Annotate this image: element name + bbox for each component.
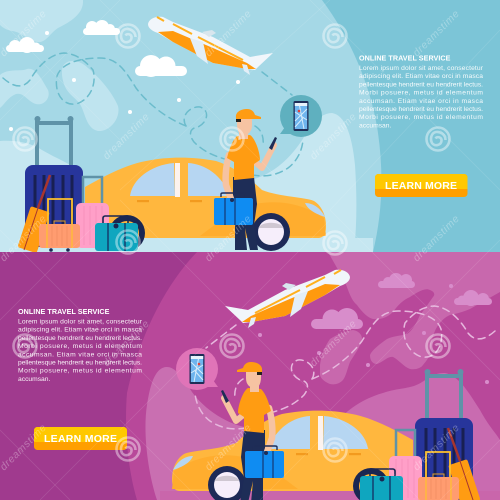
watermark overlay: dreamstime [101,111,152,162]
text block: bottom heading and body: accumsan. Etiam vitae orci in masca [18,351,142,358]
pink world map top right [328,252,500,369]
light map blobs [0,0,118,131]
map dots [9,31,240,131]
watermark overlay: dreamstime [203,422,254,473]
panel: blue top banner [0,0,500,253]
text block: bottom heading and body: ONLINE TRAVEL SERVICE [18,307,110,316]
text block: top heading and body [359,54,484,129]
dashed flight route [3,53,303,176]
airplane [225,270,350,328]
dashed flight route [195,306,495,429]
button: top learn more [375,174,468,197]
text block: top heading and body: Lorem ipsum dolor sit amet, consectetur [359,65,484,72]
ground strip [160,491,335,500]
text block: bottom heading and body [18,307,143,383]
watermark overlay: dreamstime [203,213,254,264]
text block: bottom heading and body: pellentesque hendrerit eu hendrerit lectus. [18,335,142,342]
yellow car [85,158,326,251]
traveller man with bag and phone [221,362,284,500]
button: bottom learn more [34,427,127,450]
pink hill right [346,373,500,491]
text block: top heading and body: adipiscing elit. Etiam vitae orci in masca [359,73,483,80]
pink clouds [311,273,492,330]
text block: bottom heading and body: Morbi posuere, metus id elementum [18,343,142,350]
text block: top heading and body: pellentesque hendrerit eu hendrerit lectus. [359,106,483,113]
text block: top heading and body: pellentesque hendrerit eu hendrerit lectus. [359,81,483,88]
light hill right [254,113,356,238]
watermark overlay: dreamstime [101,318,152,369]
yellow car [172,411,413,500]
text block: bottom heading and body: accumsan. [18,376,50,383]
speech bubble with phone map [176,348,218,390]
light hill left [0,140,69,238]
button: bottom learn more: LEARN MORE [44,433,117,445]
text block: bottom heading and body: adipiscing elit. Etiam vitae orci in masca [18,327,142,334]
traveller man with bag and phone [214,109,277,250]
watermark overlay: dreamstime [203,8,254,59]
watermark overlay: dreamstime [411,422,462,473]
panel: purple bottom banner [0,252,500,500]
text block: top heading and body: accumsan. Etiam vitae orci in masca [359,98,483,105]
speech bubble with phone map [280,95,322,137]
lighter right background [126,252,500,500]
ground strip [70,238,373,252]
text block: top heading and body: accumsan. [359,122,391,129]
clouds [6,20,187,77]
text block: top heading and body: Morbi posuere, metus id elementum [359,114,483,121]
text block: bottom heading and body: Lorem ipsum dolor sit amet, consectetur [18,318,143,326]
watermark overlay: dreamstime [308,318,359,369]
airplane [148,17,273,75]
button: top learn more: LEARN MORE [385,180,457,192]
darker right background [322,0,500,252]
watermark overlay: dreamstime [411,213,462,264]
text block: top heading and body: ONLINE TRAVEL SERVICE [359,54,451,62]
pink map blob left [320,330,362,384]
luggage group [17,116,145,253]
text block: bottom heading and body: Morbi posuere, metus id elementum [18,368,142,375]
text block: top heading and body: Morbi posuere, metus id elementum [359,90,483,97]
text block: bottom heading and body: pellentesque hendrerit eu hendrerit lectus. [18,360,142,366]
luggage group [353,369,481,500]
watermark overlay: dreamstime [411,8,462,59]
pink hill left [146,367,244,500]
watermark overlay: dreamstime [308,111,359,162]
pink map dots [258,284,489,384]
